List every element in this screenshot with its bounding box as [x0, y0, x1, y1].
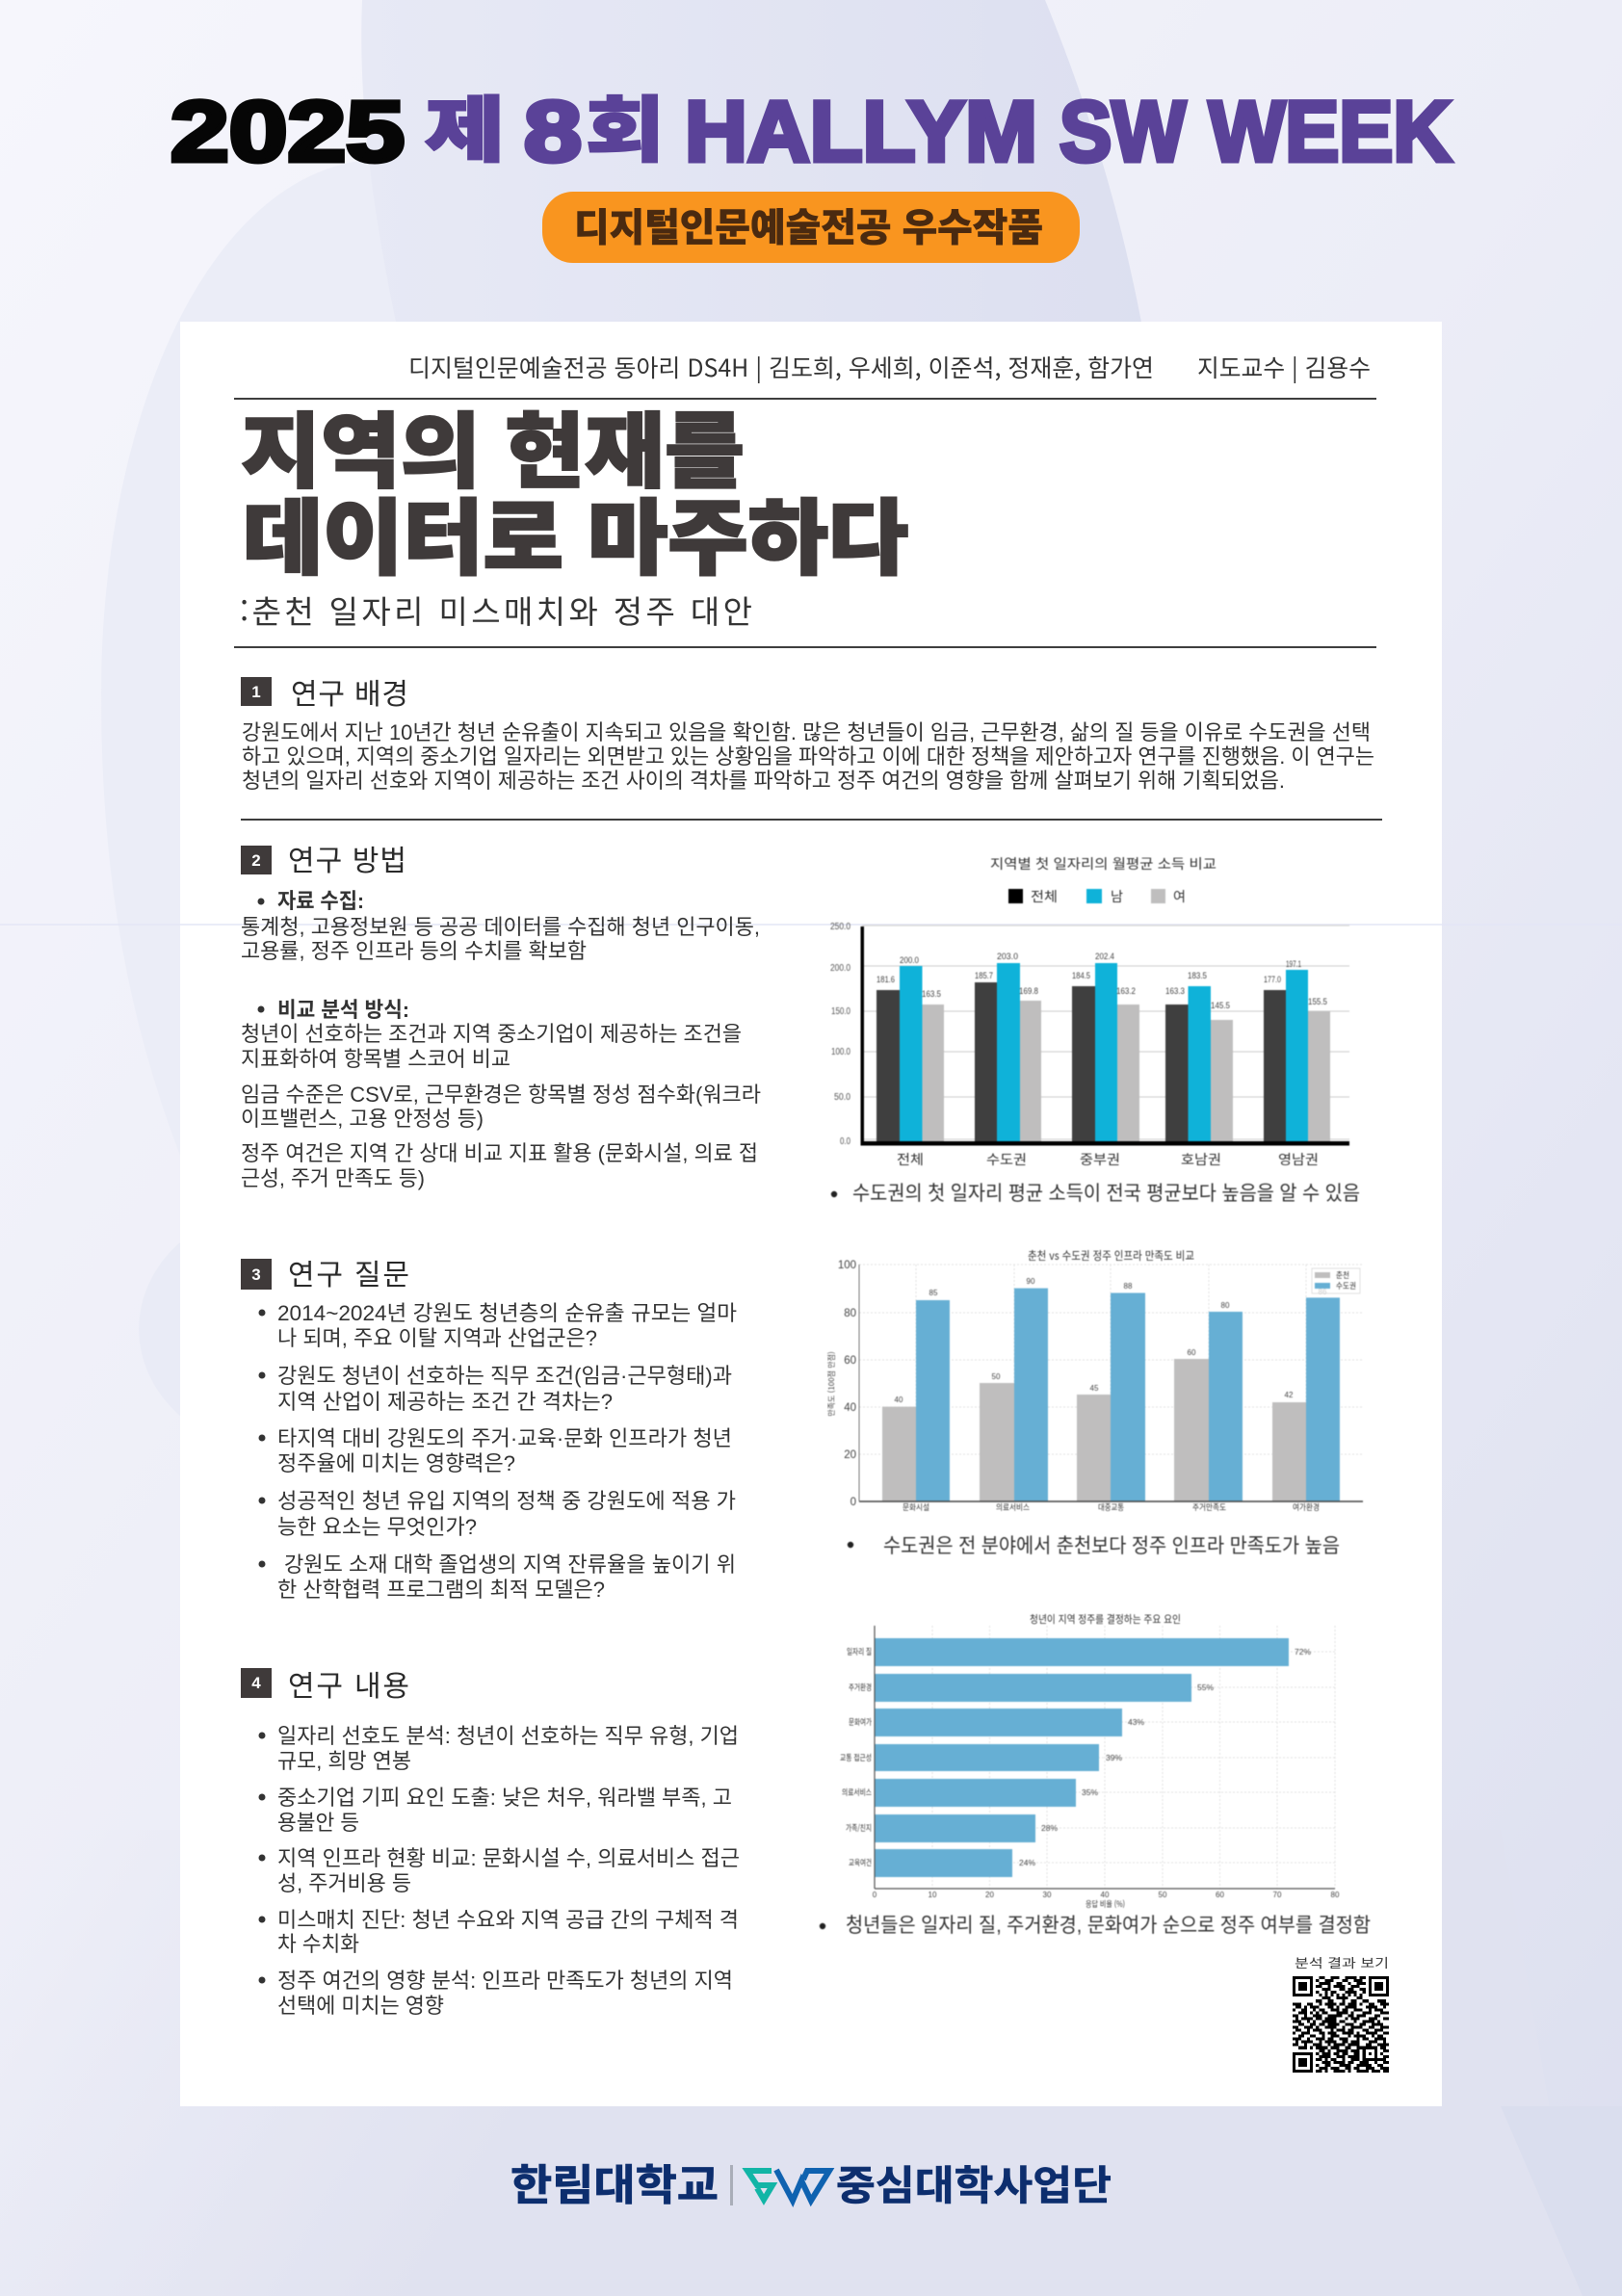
bar category labels: 교통 접근성: [840, 1752, 872, 1763]
value labels: 197.1: [1286, 959, 1301, 970]
legend: [1312, 1268, 1360, 1296]
QR caption: 분석 결과 보기: [1295, 1953, 1389, 1971]
QR code: view analysis results: [1293, 1953, 1389, 2073]
text block: content list: 선택에 미치는 영향: [277, 1994, 444, 2018]
x axis labels: 30: [1043, 1891, 1052, 1899]
chart: Chuncheon vs metropolitan infrastructure satisfaction: [826, 1247, 1363, 1557]
text block: content list: 성, 주거비용 등: [277, 1871, 411, 1895]
heading: section 3: 3: [251, 1265, 261, 1284]
authors line: 디지털인문예술전공 동아리 DS4H | 김도희, 우세희, 이준석, 정재훈, 함가연: [408, 350, 1154, 384]
x axis labels: 50: [1159, 1891, 1167, 1899]
category labels: 영남권: [1278, 1150, 1319, 1169]
legend: 86: [1319, 1288, 1327, 1296]
heading: section 1: 연구 배경: [291, 670, 408, 713]
title banner: 회: [586, 73, 665, 176]
value labels: [876, 952, 1327, 1011]
value labels: 183.5: [1188, 971, 1207, 981]
text block: question list: 타지역 대비 강원도의 주거·교육·문화 인프라가 청년: [277, 1426, 732, 1450]
y axis labels: 80: [844, 1308, 856, 1319]
x axis labels: 0: [873, 1891, 877, 1899]
title banner: SW: [1060, 83, 1186, 179]
text block: data collection: [241, 889, 760, 963]
text block: question list: 한 산학협력 프로그램의 최적 모델은?: [277, 1578, 605, 1602]
value labels: 60: [1188, 1348, 1196, 1357]
value labels: 40: [895, 1396, 903, 1404]
heading: section 1: 1: [251, 683, 261, 701]
text block: background summary: 강원도에서 지난 10년간 청년 순유출이 지속되고 있음을 확인함. 많은 청년들이 임금, 근무환경, 삶의 질 등을 이유로 수도권을 선택: [242, 720, 1371, 744]
axes: [859, 1265, 1363, 1501]
bars: 영남권: [1264, 970, 1330, 1141]
y axis labels: [830, 922, 850, 1147]
badge: department award: [542, 192, 1080, 263]
value labels: 88: [1124, 1282, 1133, 1291]
bar category labels: 일자리 질: [847, 1646, 872, 1657]
text block: question list: 강원도 청년이 선호하는 직무 조건(임금·근무형태)과: [277, 1364, 732, 1388]
title banner: HALLYM: [685, 83, 1037, 179]
section 1: research background: [241, 670, 1374, 793]
value labels: 184.5: [1072, 971, 1090, 981]
text block: question list: 능한 요소는 무엇인가?: [277, 1515, 477, 1539]
university name: 한림대학교: [510, 2151, 719, 2212]
text block: comparative analysis: 청년이 선호하는 조건과 지역 중소기업이 제공하는 조건을: [241, 1022, 742, 1046]
text block: content list: 정주 여건의 영향 분석: 인프라 만족도가 청년의 지역: [277, 1969, 733, 1993]
category labels: 여가환경: [1293, 1501, 1320, 1513]
bar category labels: [840, 1646, 872, 1868]
title banner: 제: [425, 73, 505, 176]
chart caption: 수도권의 첫 일자리 평균 소득이 전국 평균보다 높음을 알 수 있음: [852, 1183, 1360, 1205]
value labels: [895, 1277, 1294, 1404]
authors line: 지도교수 | 김용수: [1197, 350, 1371, 384]
bar value labels: [1019, 1647, 1311, 1867]
legend: [1008, 887, 1186, 906]
text block: background summary: [242, 720, 1374, 793]
text block: question list: 나 되며, 주요 이탈 지역과 산업군은?: [277, 1326, 597, 1350]
text block: background summary: 하고 있으며, 지역의 중소기업 일자리는 외면받고 있는 상황임을 파악하고 이에 대한 정책을 제안하고자 연구를 진행했음. 이 연구는: [242, 744, 1374, 769]
heading: section 2: 연구 방법: [288, 837, 406, 879]
bar value labels: 43%: [1128, 1717, 1144, 1727]
main title: 지역의 현재를: [241, 386, 745, 505]
text block: question list: 성공적인 청년 유입 지역의 정책 중 강원도에 적용 가: [277, 1489, 736, 1513]
category labels: 대중교통: [1098, 1501, 1124, 1513]
chart caption: 수도권은 전 분야에서 춘천보다 정주 인프라 만족도가 높음: [883, 1535, 1340, 1557]
section 4: research content: [241, 1662, 740, 2018]
QR pattern: [1293, 1976, 1389, 2073]
chart: factors deciding youth settlement: [820, 1611, 1371, 1937]
axes: [875, 1626, 1335, 1889]
bar value labels: 24%: [1019, 1858, 1035, 1867]
legend: 수도권: [1336, 1280, 1356, 1292]
y axis labels: 0.0: [840, 1136, 850, 1147]
program name: 중심대학사업단: [836, 2153, 1112, 2212]
bar category labels: 주거환경: [849, 1682, 872, 1693]
legend: 춘천: [1336, 1269, 1349, 1281]
x axis labels: 40: [1101, 1891, 1110, 1899]
bar value labels: 39%: [1106, 1753, 1122, 1762]
value labels: 42: [1285, 1391, 1294, 1399]
subtitle: :춘천 일자리 미스매치와 정주 대안: [240, 587, 752, 633]
bars: 수도권: [916, 1289, 1340, 1501]
bar value labels: 55%: [1197, 1683, 1214, 1692]
value labels: 163.3: [1165, 986, 1185, 997]
badge: department award: 디지털인문예술전공 우수작품: [574, 196, 1043, 252]
value labels: 145.5: [1211, 1001, 1230, 1011]
value labels: 203.0: [997, 952, 1018, 962]
text block: content list: 차 수치화: [277, 1932, 359, 1956]
footer logo: Hallym University SW: [510, 2151, 1112, 2212]
text block: content list: 일자리 선호도 분석: 청년이 선호하는 직무 유형, 기업: [277, 1724, 739, 1748]
y axis labels: 100.0: [831, 1047, 850, 1057]
text block: data collection: 고용률, 정주 인프라 등의 수치를 확보함: [241, 939, 587, 963]
text block: question list: 강원도 소재 대학 졸업생의 지역 잔류율을 높이기 위: [284, 1552, 736, 1577]
value labels: 169.8: [1019, 986, 1038, 997]
value labels: 202.4: [1095, 952, 1114, 962]
title banner: 8: [524, 83, 582, 179]
y axis labels: 50.0: [834, 1092, 850, 1103]
y axis labels: 100: [838, 1260, 856, 1271]
main title: 데이터로 마주하다: [243, 473, 908, 591]
chart: first job monthly income by region: [830, 854, 1360, 1205]
heading: section 2: 2: [251, 851, 261, 870]
value labels: 181.6: [876, 975, 895, 985]
text block: content list: 용불안 등: [277, 1811, 359, 1835]
value labels: 177.0: [1264, 975, 1281, 985]
text block: comparative analysis: 비교 분석 방식:: [277, 998, 409, 1022]
legend: 여: [1173, 887, 1186, 906]
value labels: 50: [992, 1372, 1001, 1381]
heading: section 3: 연구 질문: [288, 1251, 409, 1293]
text block: comparative analysis: 이프밸런스, 고용 안정성 등): [241, 1107, 484, 1131]
value labels: 200.0: [900, 955, 919, 966]
value labels: 185.7: [975, 971, 993, 981]
text block: content list: 중소기업 기피 요인 도출: 낮은 처우, 워라밸 부족, 고: [277, 1786, 732, 1810]
text block: question list: [258, 1301, 737, 1602]
x axis labels: 20: [985, 1891, 994, 1899]
y axis labels: 20: [844, 1449, 856, 1461]
category labels: 수도권: [986, 1150, 1027, 1169]
x axis labels: [873, 1891, 1340, 1899]
y axis labels: 200.0: [830, 963, 850, 974]
value labels: 85: [929, 1289, 938, 1297]
text block: content list: [258, 1724, 740, 2018]
title banner: WEEK: [1209, 83, 1452, 179]
x axis labels: 70: [1273, 1891, 1282, 1899]
axes: [861, 926, 1349, 1146]
bar value labels: 28%: [1041, 1823, 1058, 1833]
bar category labels: 가족/친지: [846, 1822, 872, 1834]
y axis labels: [838, 1260, 856, 1508]
main title: [241, 386, 908, 591]
bar category labels: 의료서비스: [842, 1787, 872, 1798]
bars: 전체: [876, 966, 944, 1141]
value labels: 163.5: [922, 989, 941, 1000]
category labels: 의료서비스: [996, 1501, 1030, 1513]
text block: comparative analysis: 근성, 주거 만족도 등): [241, 1166, 425, 1190]
text block: comparative analysis: 정주 여건은 지역 간 상대 비교 지표 활용 (문화시설, 의료 접: [241, 1141, 758, 1165]
text block: comparative analysis: 지표화하여 항목별 스코어 비교: [241, 1047, 510, 1071]
text block: comparative analysis: [241, 998, 761, 1190]
text block: content list: 지역 인프라 현황 비교: 문화시설 수, 의료서비스 접근: [277, 1846, 740, 1870]
legend: 전체: [1031, 887, 1058, 906]
legend: 남: [1111, 887, 1123, 906]
text block: question list: 지역 산업이 제공하는 조건 간 격차는?: [277, 1390, 613, 1414]
bar category labels: 문화여가: [849, 1716, 872, 1728]
text block: data collection: 자료 수집:: [277, 889, 364, 913]
heading: section 4: 연구 내용: [288, 1662, 409, 1705]
value labels: 163.2: [1116, 986, 1136, 997]
bars: [875, 1638, 1289, 1877]
y axis labels: 40: [844, 1402, 856, 1414]
category labels: 전체: [897, 1150, 924, 1169]
x axis labels: 60: [1216, 1891, 1224, 1899]
title banner: [170, 73, 1452, 179]
y axis title: 만족도 (100점 만점): [826, 1351, 837, 1417]
text block: content list: 규모, 희망 연봉: [277, 1749, 411, 1773]
chart caption: 청년들은 일자리 질, 주거환경, 문화여가 순으로 정주 여부를 결정함: [846, 1915, 1371, 1937]
section 3: research questions: [241, 1251, 737, 1602]
category labels: 호남권: [1181, 1150, 1221, 1169]
panel: poster card: [180, 322, 1442, 2106]
y axis labels: 60: [844, 1355, 856, 1367]
text block: question list: 2014~2024년 강원도 청년층의 순유출 규모는 얼마: [277, 1301, 737, 1325]
bar value labels: 72%: [1295, 1647, 1311, 1657]
text block: content list: 미스매치 진단: 청년 수요와 지역 공급 간의 구체적 격: [277, 1908, 739, 1932]
x axis labels: 80: [1331, 1891, 1340, 1899]
title banner: 2025: [170, 83, 405, 179]
bar value labels: 35%: [1082, 1787, 1098, 1797]
bars: 춘천: [882, 1359, 1306, 1501]
x axis labels: 10: [929, 1891, 937, 1899]
text block: background summary: 청년의 일자리 선호와 지역이 제공하는 조건 사이의 격차를 파악하고 정주 여건의 영향을 함께 살펴보기 위해 기획되었음.: [242, 769, 1285, 793]
text block: data collection: 통계청, 고용정보원 등 공공 데이터를 수집해 청년 인구이동,: [241, 915, 760, 939]
category labels: 문화시설: [903, 1501, 929, 1513]
value labels: 80: [1221, 1301, 1230, 1310]
bars: 중부권: [1072, 963, 1139, 1141]
bars: 수도권: [975, 963, 1041, 1141]
section 2: research method: [241, 837, 761, 1190]
chart title: 청년이 지역 정주를 결정하는 주요 요인: [1030, 1611, 1181, 1627]
value labels: 90: [1027, 1277, 1035, 1286]
text block: comparative analysis: 임금 수준은 CSV로, 근무환경은 항목별 정성 점수화(워크라: [241, 1083, 761, 1107]
category labels: [897, 1150, 1319, 1169]
x axis title: 응답 비율 (%): [1086, 1898, 1125, 1910]
y axis labels: 150.0: [831, 1006, 850, 1017]
value labels: 45: [1090, 1384, 1099, 1393]
value labels: 155.5: [1308, 997, 1327, 1007]
category labels: 주거만족도: [1192, 1501, 1226, 1513]
icon: SW mark: [747, 2170, 829, 2201]
y axis labels: 250.0: [830, 922, 850, 932]
heading: section 4: 4: [251, 1674, 261, 1692]
chart title: 춘천 vs 수도권 정주 인프라 만족도 비교: [1028, 1247, 1194, 1264]
chart title: 지역별 첫 일자리의 월평균 소득 비교: [990, 854, 1216, 874]
y axis labels: 0: [850, 1497, 856, 1508]
text block: question list: 정주율에 미치는 영향력은?: [277, 1451, 515, 1475]
bars: 호남권: [1165, 986, 1233, 1141]
bar category labels: 교육여건: [849, 1857, 872, 1868]
category labels: [903, 1501, 1320, 1513]
category labels: 중부권: [1080, 1150, 1120, 1169]
